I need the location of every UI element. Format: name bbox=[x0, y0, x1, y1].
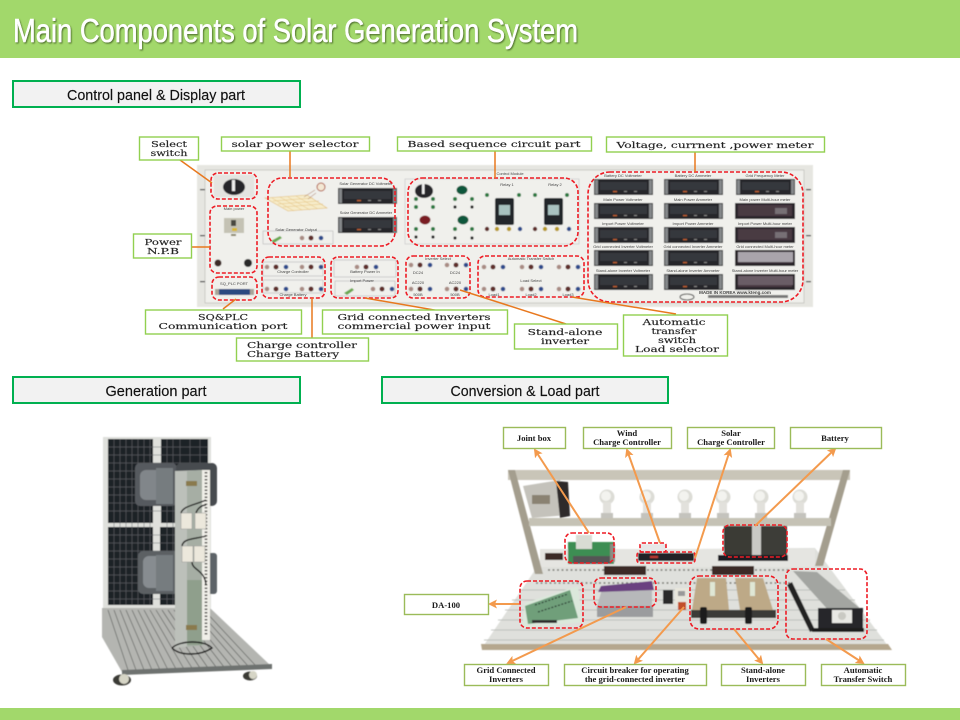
vertical aluminium column bbox=[172, 470, 212, 654]
callout: solar power selector bbox=[222, 137, 370, 151]
DA-100 board bbox=[522, 586, 582, 628]
panel printed labels: Solar Generator Output bbox=[275, 227, 318, 232]
shelf frame bbox=[508, 470, 850, 574]
panel printed labels: Load3 bbox=[562, 292, 574, 297]
panel printed labels: DC24 bbox=[450, 270, 461, 275]
callout: automatic transfer switch load selector: Automatic bbox=[641, 318, 706, 328]
callout: solar charge controller: Solar bbox=[721, 428, 741, 438]
callout: power N.P.B: N.P.B bbox=[147, 247, 179, 257]
panel printed labels: SQ_PLC PORT bbox=[220, 281, 249, 286]
voltage, current and power meters bbox=[594, 179, 795, 290]
icon: communication port bbox=[215, 289, 254, 295]
title: Main Components of Solar Generation System bbox=[13, 12, 578, 49]
callout: voltage, current, power meter: Voltage, currnent ,power meter bbox=[615, 141, 815, 151]
callout: DA-100: DA-100 bbox=[432, 600, 460, 610]
panel printed labels: Import Power Ammeter bbox=[673, 221, 714, 226]
callout: automatic transfer switch: Automatic bbox=[844, 665, 883, 675]
joint box bbox=[545, 535, 615, 564]
photo: conversion and load rack bbox=[481, 470, 892, 650]
panel printed labels: Stand-alone Inverter Voltmeter bbox=[596, 268, 651, 273]
callout: select switch: switch bbox=[150, 149, 188, 159]
callout: grid connected inverters commercial power input: commercial power input bbox=[338, 322, 491, 332]
panel: control panel photo bbox=[197, 165, 813, 307]
solar charge controller and batteries bbox=[718, 525, 788, 561]
callout: automatic transfer switch load selector: switch bbox=[658, 336, 697, 346]
panel printed labels: Solar Generator DC Voltmeter bbox=[339, 181, 393, 186]
solar panels bbox=[103, 437, 211, 608]
callout: based sequence circuit part: Based sequence circuit part bbox=[408, 140, 581, 150]
inverters on column bbox=[135, 463, 217, 594]
panel printed labels: Grid connected Inverter Voltmeter bbox=[593, 244, 654, 249]
panel printed labels: 500B bbox=[413, 292, 423, 297]
callout: battery bbox=[790, 428, 882, 448]
red dashed regions on rack bbox=[520, 525, 867, 639]
heading: conversion and load part bbox=[382, 377, 668, 403]
panel printed labels: Load1 bbox=[488, 292, 500, 297]
panel printed labels: Automatic Transfer Switch bbox=[508, 256, 554, 261]
panel printed labels: Charge Battery bbox=[280, 292, 306, 297]
callout: select switch bbox=[140, 137, 198, 160]
panel printed labels: Charge Controller bbox=[277, 269, 309, 274]
panel printed labels: MADE IN KOREA www.kteng.com bbox=[699, 290, 771, 295]
callout: grid connected inverters bbox=[464, 664, 548, 686]
logo strip bbox=[680, 294, 788, 300]
panel printed labels: DC24 bbox=[413, 270, 424, 275]
callout: automatic transfer switch load selector: transfer bbox=[652, 327, 698, 337]
callout: grid connected inverters: Inverters bbox=[489, 674, 524, 684]
callout: wind charge controller bbox=[584, 428, 672, 448]
callout: solar charge controller: Charge Controller bbox=[697, 437, 765, 447]
panel printed labels: 500B bbox=[450, 292, 460, 297]
panel printed labels: Load2 bbox=[525, 292, 537, 297]
callout: charge controller charge battery bbox=[236, 338, 368, 361]
callout: power N.P.B: Power bbox=[144, 238, 183, 248]
callout: battery: Battery bbox=[821, 433, 850, 443]
callout: charge controller charge battery: Charge controller bbox=[247, 341, 358, 351]
callout: stand-alone inverter: inverter bbox=[541, 337, 590, 347]
meter on shelf bbox=[523, 480, 570, 518]
callout: circuit breaker: the grid-connected inverter bbox=[585, 674, 685, 684]
callout: stand-alone inverter: Stand-alone bbox=[528, 328, 602, 338]
circuit breaker bbox=[663, 588, 689, 610]
panel printed labels: AC220 bbox=[449, 280, 462, 285]
panel printed labels: Main power Multi-hour meter bbox=[740, 197, 791, 202]
callout: solar power selector: solar power selector bbox=[232, 140, 360, 150]
callout: based sequence circuit part bbox=[398, 137, 592, 151]
panel printed labels: Relay 1 bbox=[500, 182, 515, 187]
heading: control panel and display part bbox=[13, 81, 300, 107]
panel printed labels: Main Power Voltmeter bbox=[603, 197, 643, 202]
panel printed labels: AC220 bbox=[412, 280, 425, 285]
sequence circuit part controls bbox=[414, 184, 571, 240]
heading: control panel and display part: Control panel & Display part bbox=[67, 87, 246, 104]
panel printed labels: Grid connected Inverter Ammeter bbox=[664, 244, 723, 249]
grid connected inverter bbox=[597, 581, 654, 617]
panel printed labels: Main Power Ammeter bbox=[674, 197, 713, 202]
panel printed labels: Import Power Voltmeter bbox=[602, 221, 645, 226]
automatic transfer switch unit bbox=[787, 571, 864, 632]
callout: stand-alone inverters: Stand-alone bbox=[741, 665, 785, 675]
callout: circuit breaker: Circuit breaker for operating bbox=[581, 665, 689, 675]
callout: power N.P.B bbox=[134, 234, 192, 258]
callout: grid connected inverters commercial power input: Grid connected Inverters bbox=[338, 313, 490, 323]
callout: voltage, current, power meter bbox=[606, 137, 824, 152]
panel printed labels: Solar Generator DC Ammeter bbox=[340, 210, 393, 215]
light bulbs bbox=[600, 490, 808, 518]
header bar bbox=[0, 0, 960, 58]
heading: conversion and load part: Conversion & Load part bbox=[450, 383, 600, 400]
panel printed labels bbox=[220, 171, 799, 297]
panel printed labels: Import Power bbox=[350, 278, 375, 283]
callout: SQ and PLC communication port: SQ&PLC bbox=[198, 313, 248, 323]
arrows on rack bbox=[490, 449, 863, 663]
callout: charge controller charge battery: Charge Battery bbox=[247, 350, 339, 360]
panel printed labels: Grid connected Multi-hour meter bbox=[736, 244, 794, 249]
photo: solar generation unit bbox=[102, 437, 272, 686]
panel printed labels: Inverter Select bbox=[425, 256, 452, 261]
footer bar bbox=[0, 708, 960, 720]
wind charge controller bbox=[638, 544, 694, 561]
callout: circuit breaker bbox=[564, 664, 706, 686]
callout: joint box: Joint box bbox=[517, 433, 552, 443]
panel printed labels: Stand-alone Inverter Multi-hour meter bbox=[732, 268, 799, 273]
icon: select switch knob bbox=[214, 175, 254, 197]
stand-alone inverters bbox=[691, 578, 776, 624]
callout: DA-100 bbox=[404, 594, 488, 614]
callout: stand-alone inverter bbox=[514, 324, 618, 349]
callout: stand-alone inverters: Inverters bbox=[746, 674, 781, 684]
panel printed labels: Battery Power In bbox=[350, 269, 380, 274]
callout: wind charge controller: Wind bbox=[617, 428, 637, 438]
panel printed labels: Grid Frequency Meter bbox=[746, 173, 785, 178]
callout: automatic transfer switch load selector: Load selector bbox=[635, 345, 720, 355]
panel printed labels: Battery DC Voltmeter bbox=[604, 173, 642, 178]
panel printed labels: Import Power Multi-hour meter bbox=[738, 221, 793, 226]
callout: grid connected inverters commercial power input bbox=[322, 310, 508, 334]
callout: solar charge controller bbox=[688, 428, 774, 448]
callout: select switch: Select bbox=[151, 140, 188, 150]
leader lines for control panel callouts bbox=[180, 151, 695, 338]
callout: automatic transfer switch: Transfer Switch bbox=[834, 674, 893, 684]
panel printed labels: Control Module bbox=[496, 171, 524, 176]
base plate with slots bbox=[102, 608, 272, 686]
callout: joint box bbox=[504, 428, 566, 448]
panel printed labels: Load Select bbox=[520, 278, 542, 283]
panel printed labels: Main power bbox=[224, 206, 245, 211]
panel printed labels: Battery DC Ammeter bbox=[675, 173, 712, 178]
callout: SQ and PLC communication port: Communication port bbox=[158, 322, 288, 332]
solar generator meters bbox=[338, 188, 397, 233]
callout: automatic transfer switch load selector bbox=[624, 315, 728, 356]
callout: stand-alone inverters bbox=[722, 664, 806, 686]
panel printed labels: Stand-alone Inverter Ammeter bbox=[666, 268, 720, 273]
icon: solar cell drawing bbox=[265, 183, 327, 211]
callout: automatic transfer switch bbox=[822, 664, 906, 686]
lower deck bbox=[481, 548, 892, 650]
panel printed labels: Relay 2 bbox=[548, 182, 563, 187]
icon: main power breaker bbox=[214, 218, 252, 267]
callout: wind charge controller: Charge Controller bbox=[593, 437, 661, 447]
heading: generation part: Generation part bbox=[106, 383, 207, 400]
red dashed regions on control panel bbox=[210, 172, 803, 302]
heading: generation part bbox=[13, 377, 300, 403]
callout: SQ and PLC communication port bbox=[146, 310, 302, 334]
callout: grid connected inverters: Grid Connected bbox=[477, 665, 536, 675]
